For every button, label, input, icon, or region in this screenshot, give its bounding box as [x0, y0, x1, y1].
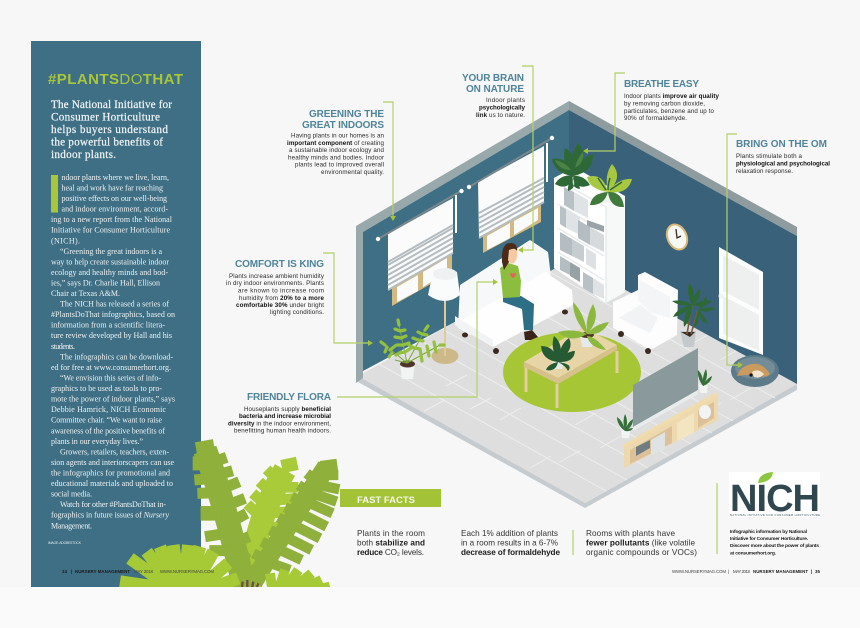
dog bed: [731, 355, 779, 387]
line: om: [727, 134, 738, 365]
NICH information note: [730, 529, 819, 556]
books: [560, 187, 604, 299]
article body: information from a scientific litera-: [51, 321, 165, 330]
article body: the infographics for promotional and: [51, 468, 170, 478]
right page footer: |: [811, 569, 812, 574]
callout: breathe easy: BREATHE EASY: [624, 79, 699, 90]
intro text: the powerful benefits of: [51, 136, 163, 148]
right page footer: WWW.NURSERYMAG.COM: [672, 569, 726, 574]
intro text: helps buyers understand: [51, 124, 168, 136]
article body: Committee chair. “We want to raise: [51, 416, 162, 425]
line: comfort: [323, 253, 368, 343]
callout: comfort is king: in dry indoor environments. Plants: [226, 280, 324, 287]
left page footer: WWW.NURSERYMAG.COM: [160, 569, 214, 574]
callout: greening the great indoors: GREAT INDOORS: [302, 120, 384, 131]
article body: graphics to be used as tools to pro-: [51, 384, 162, 393]
intro text: indoor plants.: [51, 149, 116, 161]
article body: awareness of the positive benefits of: [51, 426, 165, 435]
fact: CO2: Plants in the room: [357, 529, 425, 538]
NICH information note: Infographic information by National: [730, 529, 808, 535]
article body: ed for free at www.consumerhort.org.: [51, 363, 171, 372]
callout: breathe easy: 90% of formaldehyde.: [624, 115, 687, 122]
armchair: [613, 272, 678, 354]
article body: ecology and healthy minds and bod-: [51, 268, 168, 277]
callout: friendly flora: benefitting human health indoors.: [234, 428, 331, 434]
fact: formaldehyde: in a room results in a 6-7%: [461, 539, 558, 548]
line: greening: [383, 102, 393, 216]
bookcase: [554, 167, 625, 303]
callout: bring on the om: physiological and psychological: [736, 160, 830, 168]
article body: Initiative for Consumer Horticulture: [51, 226, 170, 235]
callout: comfort is king: humidity from 20% to a more: [239, 295, 325, 302]
callout: bring on the om: relaxation response.: [736, 168, 793, 175]
NICH information note: Initiative for Consumer Horticulture.: [730, 536, 809, 542]
palm plant: [672, 283, 715, 347]
article body: Chair at Texas A&M.: [51, 289, 120, 298]
callout: friendly flora: [228, 392, 331, 434]
article body: fographics in future issues of Nursery: [51, 511, 169, 520]
article body: “Greening the great indoors is a: [60, 247, 162, 256]
frond: light centre: [247, 463, 298, 590]
fact: formaldehyde: [461, 529, 560, 557]
frond: light bottom left: [120, 545, 238, 593]
article body: “We envision this series of info-: [60, 374, 161, 382]
article body: students.: [51, 342, 75, 351]
left page footer: MAY 2018: [134, 569, 154, 574]
line: brain: [522, 66, 533, 250]
fact: pollutants: organic compounds or VOCs): [586, 548, 697, 557]
rug: [503, 332, 641, 412]
intro text: Consumer Horticulture: [51, 112, 160, 124]
article body: Growers, retailers, teachers, exten-: [60, 447, 169, 456]
article body: and indoor environment, accord-: [62, 205, 168, 214]
right page footer: MAY 2018: [733, 569, 751, 574]
article body: positive effects on our well-being: [62, 194, 167, 203]
left page footer: |: [71, 569, 72, 574]
logo leaf: [758, 472, 773, 483]
fact: CO2: [357, 529, 425, 557]
left window: [376, 189, 464, 306]
right page footer: 35: [815, 569, 820, 574]
callout: your brain on nature: Indoor plants: [486, 97, 525, 104]
divider: fast facts: [572, 530, 574, 555]
left page footer: [62, 569, 214, 574]
callout: friendly flora: diversity in the indoor environment,: [228, 420, 331, 428]
clock: [662, 220, 692, 254]
article body: Debbie Hamrick, NICH Economic: [51, 405, 166, 414]
right page footer: NURSERY MANAGEMENT: [753, 569, 808, 574]
frond: dark right: [253, 465, 339, 582]
NICH logo: NATIONAL INITIATIVE FOR CONSUMER HORTICULTURE: [730, 513, 820, 517]
callout: comfort is king: are known to increase room: [238, 288, 324, 294]
television: [633, 348, 698, 431]
callout: your brain on nature: [462, 73, 526, 119]
callout: bring on the om: Plants stimulate both a: [736, 153, 803, 160]
callout: your brain on nature: psychologically: [479, 104, 526, 112]
article body: sion agents and interiorscapers can use: [51, 458, 174, 467]
left page footer: 34: [62, 569, 67, 574]
callout: greening the great indoors: healthy minds and bodies. Indoor: [288, 154, 384, 161]
right page footer: [672, 569, 820, 574]
intro text: [51, 99, 172, 161]
fact: CO2: reduce CO₂ levels.: [357, 548, 424, 557]
article body: [51, 173, 175, 530]
frond: light bottom right: [265, 567, 330, 587]
callout: greening the great indoors: [287, 109, 385, 176]
article body: ture review developed by Hall and his: [51, 331, 172, 340]
plant stem: [240, 580, 260, 587]
image credit: IMAGE: ADOBESTOCK: [48, 541, 82, 545]
sofa: [455, 240, 573, 354]
article body: mote the power of indoor plants,” says: [51, 395, 175, 404]
left wall: [356, 101, 569, 383]
callout: your brain on nature: YOUR BRAIN: [462, 73, 524, 84]
article body: Management.: [51, 521, 92, 530]
article body: #PlantsDoThat infographics, based on: [51, 310, 175, 319]
callout: greening the great indoors: plants lead to improved overall: [295, 162, 384, 169]
callout: your brain on nature: ON NATURE: [466, 84, 524, 95]
fact: formaldehyde: Each 1% addition of plants: [461, 529, 558, 538]
right wall: [569, 101, 797, 384]
callout: comfort is king: lighting conditions.: [270, 309, 324, 316]
left floor plant: [381, 320, 444, 379]
left page footer: NURSERY MANAGEMENT: [75, 569, 130, 574]
fact: CO2: both stabilize and: [357, 539, 425, 548]
callout: friendly flora: bacteria and increase microbial: [239, 413, 331, 420]
callout: bring on the om: [736, 139, 830, 175]
decorative fern fronds: [120, 445, 339, 597]
fact: pollutants: fewer pollutants (like volatile: [586, 539, 695, 548]
dark plant on table: [541, 336, 575, 371]
line: breathe: [588, 73, 625, 151]
plant by TV left: [617, 414, 633, 438]
callout: breathe easy: Indoor plants improve air quality: [624, 93, 720, 100]
floor lamp: [428, 268, 460, 364]
NICH information note: Discover more about the power of plants: [730, 543, 819, 549]
drop cap: [51, 175, 58, 212]
article body: educational materials and uploaded to: [51, 479, 173, 488]
callout: comfort is king: [226, 259, 325, 316]
right window: [467, 136, 554, 253]
plant on bookcase, dark: [552, 143, 593, 191]
room illustration: [356, 101, 797, 508]
floor: [358, 259, 797, 508]
callout: friendly flora: Houseplants supply beneficial: [244, 406, 331, 413]
arrowheads: [368, 148, 743, 368]
article body: heal and work have far reaching: [62, 184, 163, 192]
article body: ing to a new report from the National: [51, 215, 173, 224]
NICH information note: at consumerhort.org.: [730, 550, 777, 556]
callout: breathe easy: by removing carbon dioxide,: [624, 100, 705, 108]
divider: NICH: [716, 483, 718, 554]
line: flora: [337, 282, 493, 397]
callout: breathe easy: particulates, benzene and up to: [624, 108, 715, 115]
coffee table: [524, 327, 617, 408]
callout: friendly flora: FRIENDLY FLORA: [247, 392, 331, 403]
panel: left article column: [31, 41, 201, 587]
callout: greening the great indoors: important component of creating: [287, 140, 385, 147]
fast facts banner: [340, 489, 441, 507]
article body: Watch for other #PlantsDoThat in-: [60, 500, 166, 509]
fern on table: [558, 302, 609, 350]
fact: pollutants: [586, 529, 697, 557]
fact: pollutants: Rooms with plants have: [586, 529, 675, 538]
article body: social media.: [51, 490, 92, 499]
fast facts banner: FAST FACTS: [357, 495, 415, 506]
woman on sofa: [500, 243, 538, 340]
article body: plants in our everyday lives.”: [51, 437, 143, 446]
callout lines: [323, 66, 743, 555]
callout: greening the great indoors: environmental quality.: [321, 169, 384, 176]
callout: greening the great indoors: a sustainable indoor ecology and: [289, 147, 385, 154]
callout: comfort is king: comfortable 30% under bright: [236, 302, 324, 309]
plant by TV right: [698, 369, 712, 393]
intro text: The National Initiative for: [51, 99, 172, 111]
plant on bookcase, variegated: [587, 164, 632, 207]
article body: way to help create sustainable indoor: [51, 257, 169, 266]
callout: comfort is king: COMFORT IS KING: [235, 259, 324, 270]
frond: dark left: [193, 445, 249, 590]
article body: The NICH has released a series of: [60, 300, 169, 309]
callout: greening the great indoors: Having plants in our homes is an: [291, 132, 385, 140]
article body: The infographics can be download-: [60, 352, 173, 361]
article body: ndoor plants where we live, learn,: [62, 173, 169, 182]
callout: greening the great indoors: GREENING THE: [309, 109, 384, 120]
door: [718, 247, 763, 355]
heading: #PlantsDoThat: #PLANTSDOTHAT: [48, 71, 183, 88]
right page footer: |: [728, 569, 729, 574]
NICH logo: NICH: [730, 478, 820, 520]
TV console: [622, 392, 718, 468]
article body: ies,” says Dr. Charlie Hall, Ellison: [51, 278, 160, 288]
article body: (NICH).: [51, 236, 80, 245]
fact: formaldehyde: decrease of formaldehyde: [461, 548, 560, 557]
callout: bring on the om: BRING ON THE OM: [736, 139, 827, 150]
callout: comfort is king: Plants increase ambient humidity: [229, 273, 325, 280]
callout: your brain on nature: link us to nature.: [476, 112, 525, 119]
callout: breathe easy: [624, 79, 720, 122]
